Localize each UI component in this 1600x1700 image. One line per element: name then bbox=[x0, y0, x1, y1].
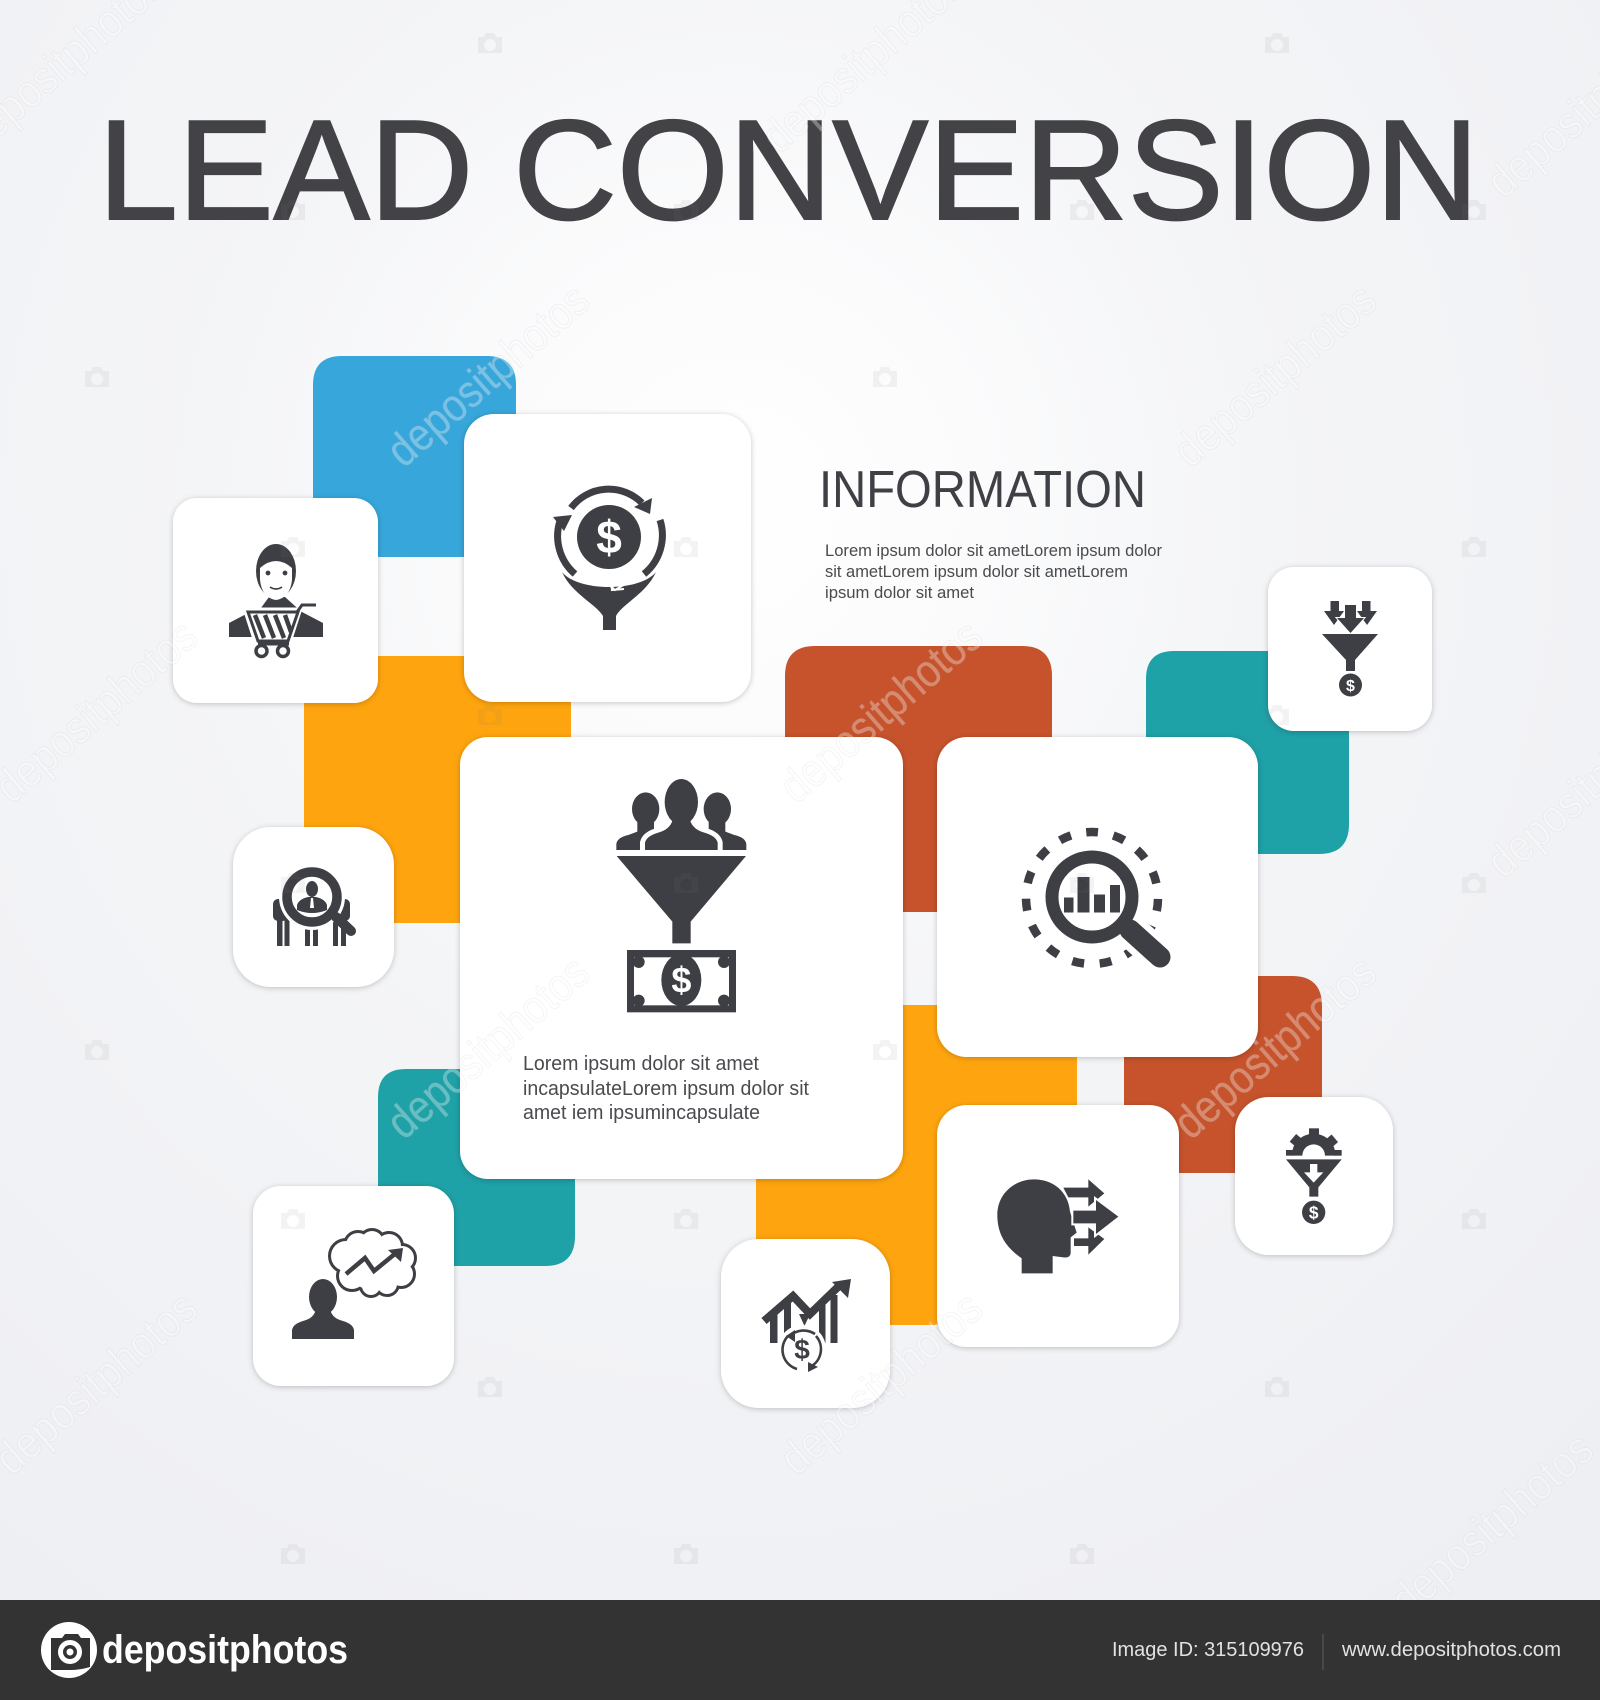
panel: orange backing block lower bbox=[756, 1005, 1077, 1325]
icon: people funnel to money: $ bbox=[671, 960, 691, 1001]
footer bar bbox=[0, 1600, 1600, 1700]
title: LEAD CONVERSION bbox=[98, 91, 1479, 250]
panel: red backing block lower right bbox=[1124, 976, 1322, 1173]
icon: dollar cycle funnel bbox=[553, 489, 662, 630]
footer image id: Image ID: 315109976 bbox=[1112, 1639, 1304, 1661]
icon: magnifier with bar chart bbox=[1026, 832, 1165, 964]
icon: people funnel to money bbox=[613, 779, 749, 1012]
icon: head with arrows bbox=[997, 1179, 1118, 1273]
panel: analytics search card bbox=[937, 737, 1258, 1057]
icon: footer camera logo bbox=[41, 1622, 97, 1678]
panel: gear funnel card bbox=[1235, 1097, 1393, 1255]
watermark: stock photo text overlay: depositphotos bbox=[1163, 945, 1386, 1149]
icon: chart arrow with dollar bbox=[764, 1279, 851, 1373]
icon: customer with shopping cart bbox=[229, 544, 323, 656]
watermark: stock photo text overlay: depositphotos bbox=[376, 273, 599, 477]
watermark: stock photo text overlay: depositphotos bbox=[769, 609, 992, 813]
panel: shopper card bbox=[173, 498, 378, 703]
panel: people search card bbox=[233, 827, 394, 987]
text block: information description bbox=[825, 542, 1162, 602]
icon: chart arrow with dollar: $ bbox=[794, 1334, 810, 1365]
panel: head arrows card bbox=[937, 1105, 1179, 1347]
panel: red backing block top bbox=[785, 646, 1052, 912]
watermark: stock photo text overlay: depositphotos bbox=[376, 945, 599, 1149]
panel: teal backing block lower left bbox=[378, 1069, 575, 1266]
text block: information description: Lorem ipsum dolor sit ametLorem ipsum dolor bbox=[825, 542, 1162, 560]
panel: main card bbox=[460, 737, 903, 1179]
panel: orange backing block left bbox=[304, 656, 571, 923]
text block: main card description: amet iem ipsumincapsulate bbox=[523, 1102, 760, 1124]
text block: main card description: incapsulateLorem ipsum dolor sit bbox=[523, 1078, 809, 1100]
footer logo wordmark: depositphotos bbox=[102, 1628, 348, 1672]
panel: blue backing block bbox=[313, 356, 516, 557]
panel: funnel arrows card bbox=[1268, 567, 1432, 731]
panel: revenue growth card bbox=[721, 1239, 890, 1408]
icon: gear funnel with coin: $ bbox=[1309, 1203, 1319, 1223]
icon: gear funnel with coin bbox=[1286, 1128, 1342, 1224]
icon: arrows into funnel with coin: $ bbox=[1346, 678, 1355, 695]
heading: information: INFORMATION bbox=[819, 461, 1146, 519]
text block: main card description bbox=[523, 1053, 809, 1124]
icon: person with growth thought cloud bbox=[292, 1231, 414, 1339]
icon: magnifier over people bbox=[273, 864, 351, 946]
text block: information description: sit ametLorem ipsum dolor sit ametLorem bbox=[825, 563, 1128, 581]
watermark: stock photo text overlay: depositphotos bbox=[769, 1281, 992, 1485]
watermark: stock photo text overlay: depositphotos bbox=[1163, 273, 1386, 477]
panel: thinking growth card bbox=[253, 1186, 454, 1386]
footer website: www.depositphotos.com bbox=[1341, 1639, 1561, 1661]
panel: revenue funnel card bbox=[464, 414, 751, 702]
panel: teal backing block top right bbox=[1146, 651, 1349, 854]
text block: information description: ipsum dolor sit amet bbox=[825, 584, 974, 602]
text block: main card description: Lorem ipsum dolor sit amet bbox=[523, 1053, 759, 1075]
icon: dollar cycle funnel: $ bbox=[596, 511, 622, 563]
icon: arrows into funnel with coin bbox=[1322, 601, 1378, 696]
watermark: camera marks bbox=[85, 33, 1486, 1564]
